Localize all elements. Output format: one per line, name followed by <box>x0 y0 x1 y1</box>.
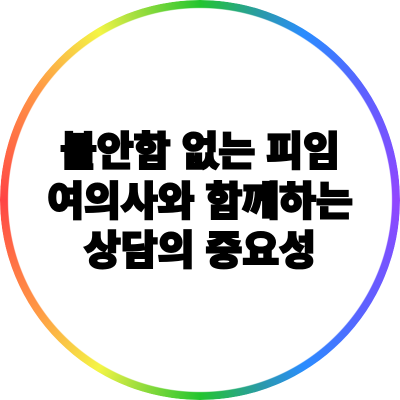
title <box>47 130 353 273</box>
title: 상담의 중요성 <box>84 229 316 273</box>
title: 여의사와 함께하는 <box>47 180 353 224</box>
title: 불안함 없는 피임 <box>60 130 340 174</box>
